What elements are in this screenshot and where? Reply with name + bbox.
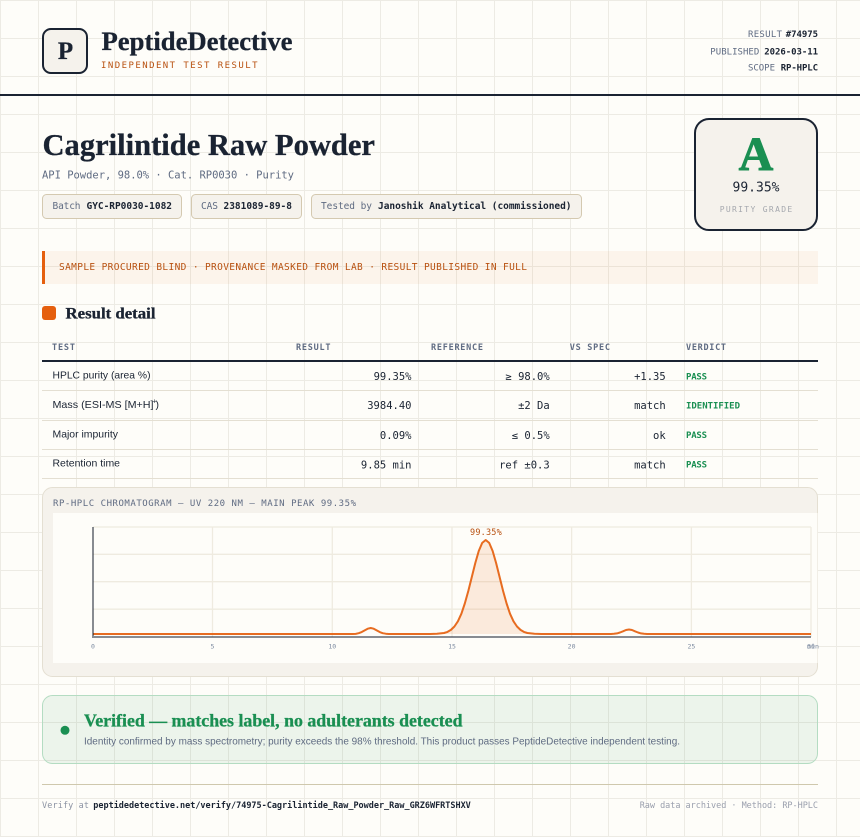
row: mass: ) <box>156 399 159 411</box>
x axis ticks: 30 <box>807 643 815 651</box>
verified body: Identity confirmed by mass spectrometry; purity exceeds the 98% threshold. This product passes PeptideDetective independent testing. <box>84 736 680 747</box>
row: mass: match <box>634 400 666 412</box>
x axis ticks: 5 <box>211 643 215 651</box>
row: HPLC purity: ≥ 98.0% <box>505 371 550 383</box>
x axis ticks: 10 <box>328 643 336 651</box>
table header: VERDICT <box>686 343 726 353</box>
table header <box>42 343 818 362</box>
icon: logo mark: P <box>58 38 73 65</box>
brand name: PeptideDetective <box>102 27 292 56</box>
row: major impurity: ≤ 0.5% <box>512 430 550 442</box>
header: result metadata: SCOPE <box>748 63 775 73</box>
pill: CAS: 2381089-89-8 <box>224 201 292 212</box>
row: mass: ±2 Da <box>518 400 550 412</box>
x axis ticks <box>91 643 819 651</box>
row: retention time: PASS <box>686 460 707 470</box>
row: major impurity: PASS <box>686 431 707 441</box>
row: mass: 3984.40 <box>367 400 412 412</box>
row: major impurity: 0.09% <box>380 430 412 442</box>
grade card: A <box>739 128 774 181</box>
footer: method note: Raw data archived · Method: RP-HPLC <box>640 801 818 811</box>
header: result metadata: RESULT <box>748 30 783 40</box>
product title: Cagrilintide Raw Powder <box>42 127 375 162</box>
pill: CAS <box>192 194 302 218</box>
row: HPLC purity: PASS <box>686 372 707 382</box>
header: brand <box>43 27 292 73</box>
callout: verified <box>42 696 818 764</box>
pill: batch: Batch <box>52 201 80 212</box>
icon: status dot <box>60 726 70 735</box>
table header: VS SPEC <box>570 343 610 353</box>
line chart: HPLC trace <box>91 527 819 651</box>
header: result metadata: #74975 <box>786 30 818 40</box>
row: major impurity: ok <box>653 430 666 442</box>
callout: blind sample banner <box>42 251 818 284</box>
panel: chromatogram <box>42 488 819 676</box>
row: HPLC purity: HPLC purity (area %) <box>52 370 150 382</box>
callout: blind sample banner: SAMPLE PROCURED BLIND · PROVENANCE MASKED FROM LAB · RESULT PUBLISHED IN FULL <box>59 262 527 273</box>
x axis ticks: 0 <box>91 643 95 651</box>
x axis ticks: 20 <box>568 643 576 651</box>
grade card: PURITY GRADE <box>720 205 792 214</box>
x axis ticks: 15 <box>448 643 456 651</box>
row: retention time <box>52 458 707 471</box>
pill: tested by: Janoshik Analytical (commissioned) <box>378 201 572 212</box>
grade card <box>695 119 817 230</box>
row: mass: Mass (ESI-MS [M+H] <box>52 399 154 411</box>
icon: logo mark <box>43 29 87 73</box>
row: retention time: match <box>634 459 666 471</box>
x axis ticks: 25 <box>687 643 695 651</box>
table header: REFERENCE <box>431 343 483 353</box>
table header: RESULT <box>296 343 330 353</box>
trace line <box>93 540 811 634</box>
pill: batch: GYC-RP0030-1082 <box>86 201 172 212</box>
section heading: result detail: Result detail <box>66 306 156 323</box>
axes <box>93 527 811 637</box>
row: mass: IDENTIFIED <box>686 402 741 412</box>
pill: tested by <box>312 194 582 218</box>
pill: tested by: Tested by <box>321 201 372 212</box>
row: HPLC purity <box>52 370 707 383</box>
pill: CAS: CAS <box>201 201 218 212</box>
row: HPLC purity: +1.35 <box>634 371 666 383</box>
footer: verify link: Verify at <box>42 801 89 811</box>
row: retention time: ref ±0.3 <box>499 459 550 471</box>
chart caption: RP-HPLC CHROMATOGRAM — UV 220 NM — MAIN PEAK 99.35% <box>53 499 357 509</box>
peak fill <box>430 540 541 634</box>
product subtitle: API Powder, 98.0% · Cat. RP0030 · Purity <box>42 170 294 182</box>
row: retention time: Retention time <box>52 458 120 470</box>
row: HPLC purity: 99.35% <box>374 371 412 383</box>
header: result metadata: PUBLISHED <box>710 47 759 57</box>
grade card: 99.35% <box>733 181 780 196</box>
header: result metadata: 2026-03-11 <box>764 47 818 57</box>
verified heading: Verified — matches label, no adulterants detected <box>84 711 463 731</box>
row: mass <box>52 398 741 412</box>
x axis ticks: min <box>807 643 819 651</box>
results table <box>42 343 818 479</box>
pill: batch <box>42 194 182 218</box>
row: major impurity <box>52 429 707 442</box>
header: result metadata <box>710 30 818 73</box>
table header: TEST <box>52 343 75 353</box>
footer: verify link: peptidedetective.net/verify/74975-Cagrilintide_Raw_Powder_Raw_GRZ6WFRTSHXV <box>93 800 471 811</box>
row: major impurity: Major impurity <box>52 429 119 441</box>
header: result metadata: RP-HPLC <box>781 63 818 73</box>
row: retention time: 9.85 min <box>361 459 412 471</box>
row: mass: + <box>152 398 157 406</box>
brand tagline: INDEPENDENT TEST RESULT <box>101 61 258 71</box>
peak label: 99.35% <box>470 528 502 538</box>
